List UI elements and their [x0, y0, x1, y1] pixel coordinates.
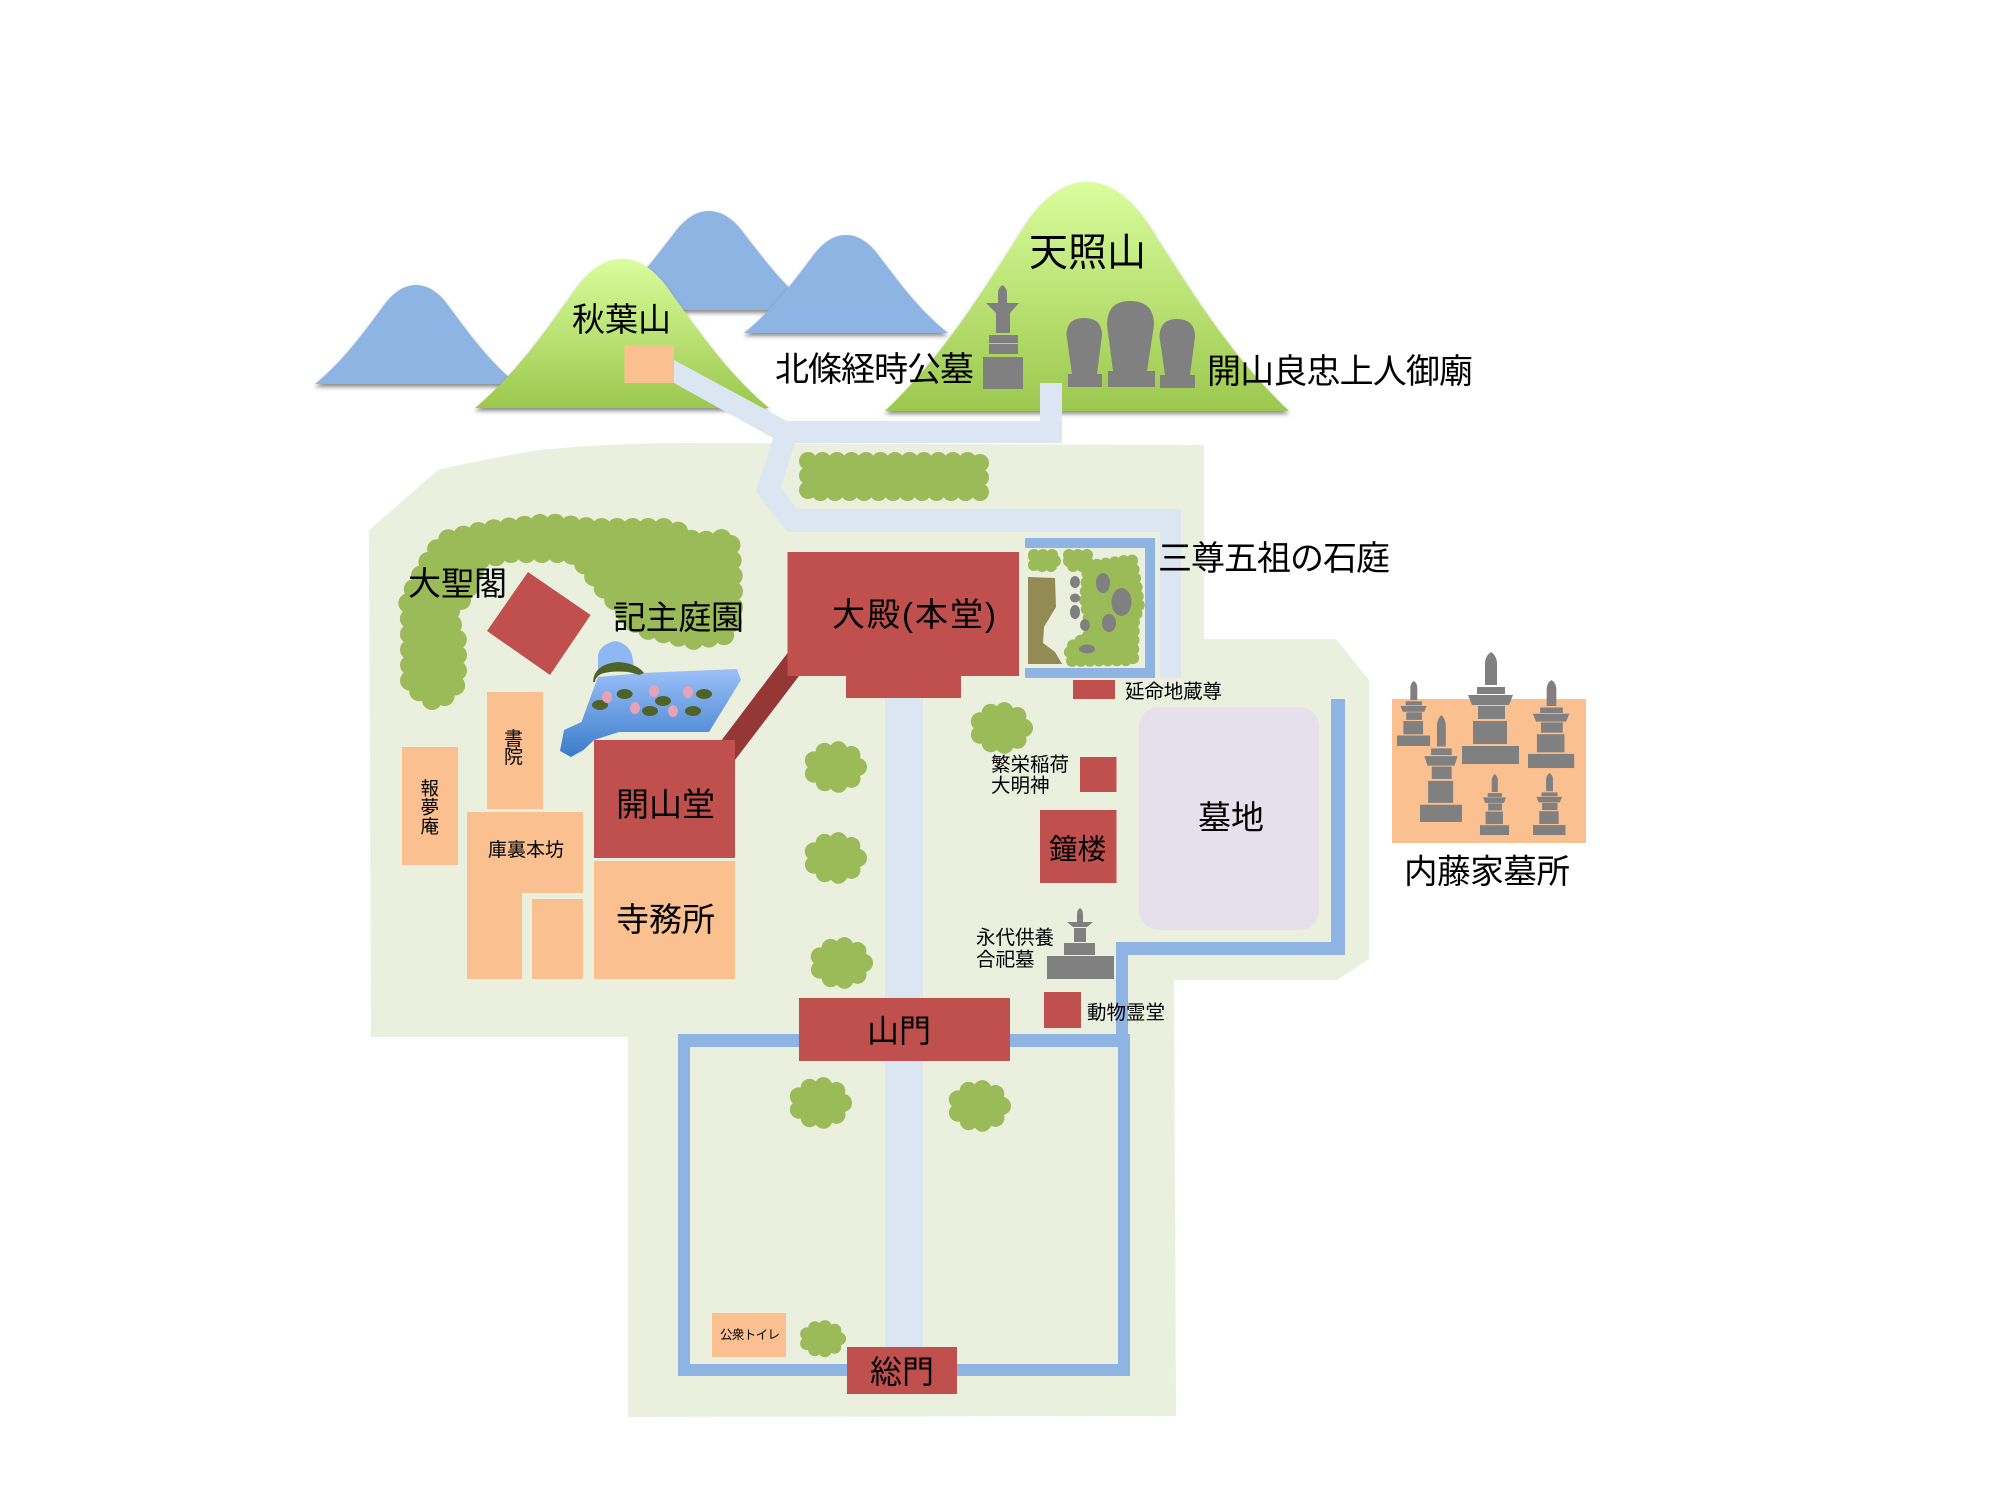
- building: Daishokaku: [487, 572, 591, 675]
- building: animal memorial hall: [1044, 992, 1081, 1028]
- mountains: blue background: [315, 211, 948, 384]
- Naito family graves: [1392, 652, 1586, 843]
- tree: west approach 3: [818, 946, 864, 980]
- mountain: far left: [315, 285, 517, 384]
- label: Kaisando: 開山堂: [616, 786, 715, 823]
- label: Somon: 総門: [870, 1354, 934, 1390]
- label: Shoin: 書: [504, 728, 523, 750]
- label: stone garden: 三尊五祖の石庭: [1158, 540, 1390, 578]
- label: animal memorial hall: 動物霊堂: [1087, 1002, 1165, 1024]
- tree: near Hanei Inari: [978, 711, 1024, 745]
- label: temple office: 寺務所: [616, 901, 715, 938]
- tree: west approach 2: [812, 841, 858, 875]
- label: Daiden main hall: 大殿(本堂): [832, 596, 996, 633]
- rocks: [1070, 573, 1132, 654]
- tree: south-west: [797, 1086, 843, 1120]
- label: perpetual memorial grave: 永代供養: [976, 927, 1054, 949]
- graves background: [1392, 699, 1586, 843]
- wall: outer compound: [678, 1034, 1130, 1376]
- label: Enmei Jizo: 延命地蔵尊: [1125, 681, 1222, 703]
- pagoda: right: [1528, 680, 1574, 768]
- wall: cemetery connector: [1116, 699, 1345, 1047]
- mountain: front centre: [744, 235, 948, 333]
- path: upper approach: [674, 360, 1181, 678]
- pagoda: lower right: [1533, 773, 1565, 835]
- pond with waterfall: [560, 641, 741, 757]
- cemetery: [1139, 707, 1319, 930]
- building: Hanei Inari: [1080, 757, 1116, 792]
- trees: [797, 711, 1024, 1351]
- label: Hojo Tsuneyoshi tomb: 北條経時公墓: [775, 351, 974, 389]
- label: Akibasan: 秋葉山: [572, 301, 671, 338]
- building: Daiden: [788, 552, 1019, 698]
- stone garden: [1028, 555, 1139, 664]
- building: Shoin: [487, 692, 543, 809]
- lotus flowers: [602, 685, 693, 717]
- label: Daishokaku: 大聖閣: [408, 565, 507, 602]
- mountain: rear centre: [604, 211, 814, 310]
- label: perpetual memorial grave: 合祀墓: [976, 949, 1035, 971]
- hedge: west garden: [408, 523, 733, 700]
- sand area: [1028, 577, 1062, 664]
- label: public toilet: 公衆トイレ: [720, 1328, 780, 1342]
- tombstones of Ryochu Shonin: [1066, 301, 1195, 388]
- building: Akiba shrine: [624, 345, 674, 383]
- label: Homuan: 夢: [420, 797, 439, 818]
- building: Kuri annex: [532, 899, 583, 979]
- perpetual memorial monument: [1047, 908, 1114, 979]
- label: Naito family graves: 内藤家墓所: [1404, 854, 1570, 891]
- building: Somon gate: [847, 1347, 957, 1394]
- mountain: Tensho: [885, 182, 1289, 411]
- building: Homuan: [402, 747, 458, 865]
- tree: by toilet: [805, 1326, 839, 1351]
- path: central approach: [885, 690, 923, 1370]
- connecting corridor: [721, 653, 799, 760]
- tree: south-east: [956, 1089, 1002, 1123]
- pagoda: centre left: [1420, 715, 1462, 822]
- label: Hanei Inari: 繁栄稲荷: [991, 754, 1069, 776]
- label: Shoin: 院: [504, 746, 523, 768]
- pond: [560, 669, 741, 757]
- pagoda: left: [1397, 681, 1430, 746]
- label: Ryochu Shonin mausoleum: 開山良忠上人御廟: [1207, 353, 1473, 391]
- label: bell tower: 鐘楼: [1049, 834, 1106, 866]
- building: Kuri Honbo: [467, 812, 583, 979]
- waterfall: [598, 641, 635, 672]
- hedge: north: [808, 461, 980, 492]
- garden shrubs: [1034, 555, 1139, 661]
- label: Tenshozan: 天照山: [1029, 232, 1146, 275]
- temple grounds: [369, 443, 1369, 1417]
- label: Hanei Inari: 大明神: [991, 775, 1050, 797]
- building: public toilet: [712, 1313, 786, 1357]
- label: Homuan: 庵: [420, 816, 439, 837]
- pagoda: large: [1462, 652, 1519, 764]
- building: Enmei Jizo: [1073, 680, 1115, 699]
- label: Sanmon: 山門: [867, 1013, 931, 1049]
- bridge: [593, 662, 644, 682]
- building: bell tower: [1040, 810, 1116, 883]
- lily pads: [592, 689, 712, 716]
- walls: [678, 538, 1345, 1376]
- building: Sanmon gate: [799, 998, 1010, 1061]
- building: Kaisando: [594, 740, 735, 858]
- building: temple office: [594, 861, 735, 979]
- label: cemetery: 墓地: [1198, 799, 1264, 836]
- wall: stone garden: [1025, 538, 1155, 678]
- label: Homuan: 報: [420, 778, 439, 799]
- Hojo Tsuneyoshi tomb pagoda: [983, 285, 1023, 389]
- pagoda: lower middle: [1480, 774, 1509, 835]
- label: Kishu garden: 記主庭園: [613, 599, 744, 636]
- mountain: Akiba: [475, 259, 769, 408]
- tree: west approach 1: [812, 750, 858, 784]
- label: Kuri Honbo: 庫裏本坊: [488, 839, 564, 861]
